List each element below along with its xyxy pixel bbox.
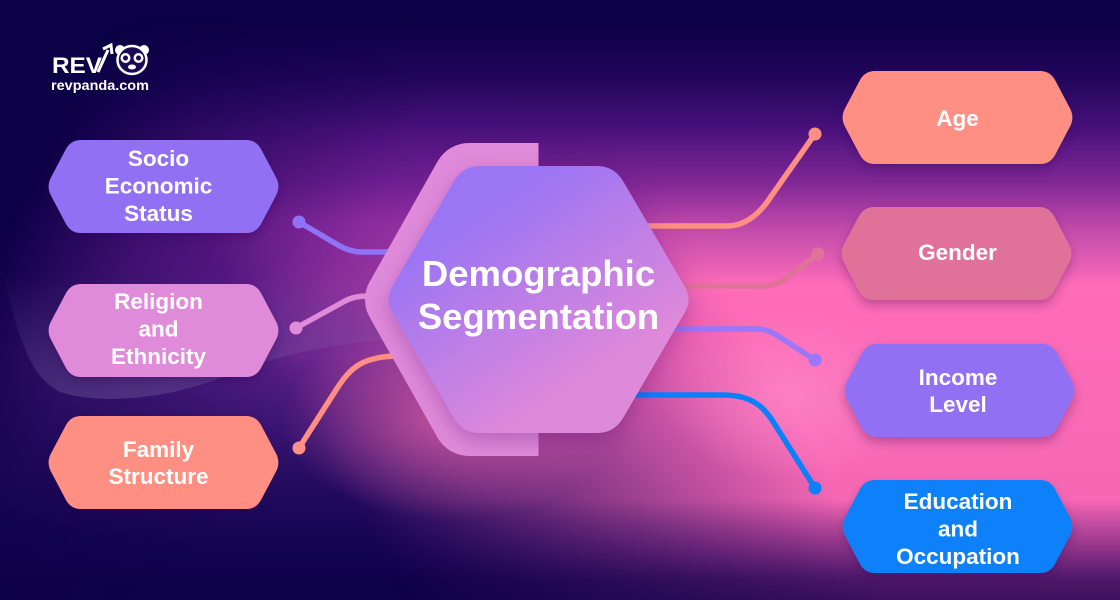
label: Education and Occupation: Occupation [896, 544, 1020, 569]
icon: growth arrow [98, 45, 112, 72]
central hexagon: Demographic Segmentation: Demographic [422, 253, 655, 294]
connector: Family Structure [292, 356, 395, 454]
label: Religion and Ethnicity: and [138, 316, 179, 342]
label: Family Structure: Structure [108, 464, 209, 489]
label: Education and Occupation: Education [904, 489, 1012, 514]
label: Age [843, 71, 1072, 164]
label: Family Structure [49, 416, 278, 509]
connector: Income Level [660, 329, 822, 366]
connector: Education and Occupation [630, 395, 822, 494]
label: Age: Age [936, 106, 979, 131]
central hexagon: Demographic Segmentation [388, 166, 688, 433]
central hexagon: Demographic Segmentation: Segmentation [418, 296, 659, 337]
label: Socio Economic Status [49, 140, 278, 233]
label: Income Level: Level [929, 392, 987, 417]
central hexagon backing shape [365, 143, 538, 456]
connector: Age [640, 128, 822, 226]
logo: Rev Panda: revpanda.com [51, 77, 149, 93]
icon: panda [115, 45, 149, 74]
label: Religion and Ethnicity [49, 284, 278, 377]
logo: Rev Panda: REV [52, 53, 102, 78]
label: Gender [842, 207, 1071, 300]
label: Education and Occupation [843, 480, 1072, 573]
logo: Rev Panda [51, 45, 149, 93]
connector: Socio Economic Status [292, 216, 395, 252]
connector: Religion and Ethnicity [290, 296, 390, 334]
label: Income Level [845, 344, 1074, 437]
label: Socio Economic Status: Status [124, 201, 193, 226]
label: Socio Economic Status: Economic [105, 174, 212, 198]
label: Religion and Ethnicity: Ethnicity [111, 344, 206, 369]
label: Family Structure: Family [123, 437, 195, 462]
label: Religion and Ethnicity: Religion [114, 289, 203, 314]
connector: Gender [670, 248, 824, 286]
label: Socio Economic Status: Socio [128, 146, 189, 171]
label: Income Level: Income [919, 365, 997, 390]
label: Education and Occupation: and [938, 516, 978, 542]
label: Gender: Gender [918, 240, 997, 265]
